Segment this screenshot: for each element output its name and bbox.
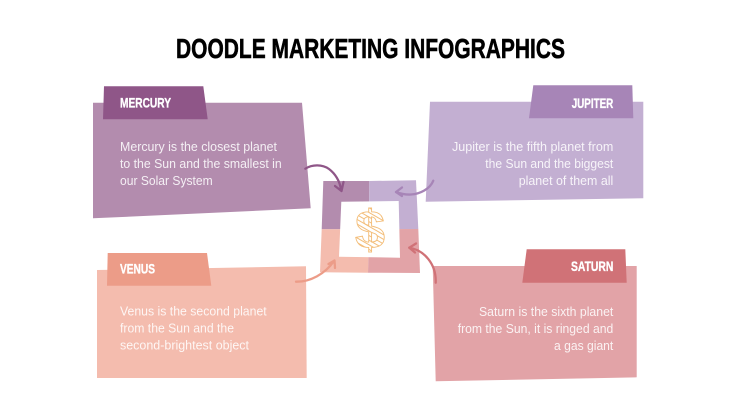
jupiter description: Jupiter is the fifth planet from [452,140,613,154]
jupiter description: the Sun and the biggest [485,157,614,171]
jupiter label tab [529,85,633,118]
mercury description: to the Sun and the smallest in [120,157,282,171]
mercury label tab: MERCURY [120,95,171,111]
jupiter label tab: JUPITER [572,95,613,111]
mercury description [120,140,282,188]
arrow: mercury [305,165,344,191]
saturn description: Saturn is the sixth planet [479,305,614,319]
panel: venus [97,253,307,378]
panel: mercury [93,86,311,218]
icon: dollar sign: $ [355,200,385,260]
title: DOODLE MARKETING INFOGRAPHICS [176,33,565,64]
mercury label tab [103,86,208,119]
saturn description: a gas giant [554,339,614,353]
panel: jupiter [426,85,643,202]
saturn description: from the Sun, it is ringed and [458,322,613,336]
saturn description [458,305,614,353]
venus label tab [107,253,211,286]
venus label tab: VENUS [120,260,155,276]
saturn label tab [522,249,627,283]
arrow: venus [296,260,335,282]
arrow: jupiter [396,181,433,196]
venus description [120,305,267,353]
venus description: from the Sun and the [120,322,234,336]
saturn label tab: SATURN [571,258,613,274]
venus description: second-brightest object [120,339,250,353]
mercury description: our Solar System [120,174,213,188]
panel: saturn [433,249,637,381]
mercury description: Mercury is the closest planet [120,140,278,154]
jupiter description [452,140,614,188]
central square diagram [320,180,420,273]
venus description: Venus is the second planet [120,305,267,319]
arrow: saturn [409,244,436,283]
jupiter description: planet of them all [519,174,613,188]
